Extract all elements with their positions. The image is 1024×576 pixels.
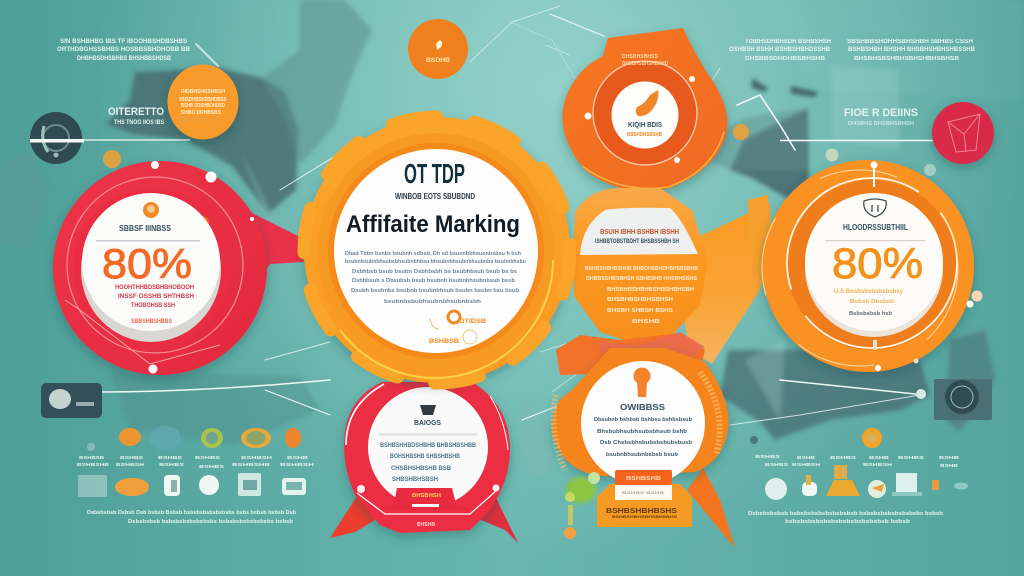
caption — [748, 511, 943, 525]
labels: BSHBS — [195, 455, 220, 460]
card body text — [585, 266, 698, 325]
top left label — [108, 106, 164, 126]
card heading: ISHBBTOBSTBDHT BHSBSSHBH SH — [595, 239, 679, 245]
big number: 80% — [832, 240, 923, 288]
caption — [87, 510, 296, 525]
lower icons — [765, 465, 968, 500]
stat text — [115, 285, 194, 325]
left ribbon — [330, 496, 380, 538]
base box — [597, 470, 692, 527]
caption: Dsbsbsbsb Dsbsb Dsb bsbsb Bsbsb bsbsbsbsbsbsbsbs bsbs bsbsb bsbsb Dsb — [87, 510, 296, 516]
orange stat circle left: SHBD DDHBSBS — [181, 110, 222, 116]
body text: bsubnbsubnbhsubsbhsubnbhbsu bhsubnbhsubnbhsubnbs bsubnbhsbu — [345, 259, 526, 265]
orange logo: BSHBSB — [429, 339, 460, 345]
top right text block 1 — [729, 39, 831, 62]
top center orange circle — [408, 19, 468, 79]
small coin icons top right — [103, 124, 936, 176]
body text: bsubnbhsubnbsbsb bsub — [606, 452, 679, 458]
body text — [594, 417, 693, 458]
icon: dark card bottom left — [41, 383, 102, 418]
body text: Dsb Chsbsbhsbubsbsbubsbusb — [600, 440, 693, 446]
panel: right orange stat — [748, 160, 982, 372]
title: OT TDP — [404, 158, 465, 189]
network lines — [100, 6, 925, 425]
labels: BSHBS — [159, 462, 184, 467]
base box: BSHBS BSHB — [622, 490, 664, 495]
orange heading text: DHSBHSBHSHBSHD — [622, 61, 668, 67]
top icons — [87, 426, 301, 451]
arrow wedge — [687, 468, 735, 548]
labels: BSHBSHB — [77, 462, 110, 467]
card body text: BHSBH SHBSH BSHS — [607, 308, 673, 314]
labels: BSHBSH — [863, 462, 892, 467]
red banner — [380, 488, 470, 528]
panel: bottom red badge — [330, 382, 518, 543]
labels: BSHBSB — [79, 455, 105, 460]
red banner: BHSBHSH — [412, 493, 441, 499]
labels: BSHBSHB — [232, 462, 271, 467]
body text: Dsubh bsubnbs bsubnb bsubnbhsub bsubn bsubn bsu bsub — [351, 288, 520, 294]
labels: BSHBS — [830, 455, 856, 460]
stat text: SBBSHBSHBBS — [131, 319, 172, 325]
top right text block 1: TDIBHSDHBHSDH BSHBSHSH — [745, 39, 831, 45]
labels: BSHB — [797, 455, 816, 460]
orange logo: OTIDSB — [459, 319, 487, 325]
orange stat circle left: DIDBHSHSSHBSH — [181, 89, 225, 95]
body text: Dsbhbsub s Dbsubsb bsub bsubnb bsubnbhsubnbsub bsub — [352, 278, 516, 284]
card body text: BHSBHBSHBHSBHSH — [607, 297, 673, 303]
icons row: bottom right — [748, 428, 968, 525]
orange heading text: DHSBHSBHSS — [622, 54, 659, 60]
base box: BSHBSHBHBSHS — [606, 508, 677, 515]
stat text: THOBOHSB SSH — [131, 303, 175, 309]
card body text: BHSBHBSHBHBSHBSHBHSBH — [607, 287, 694, 293]
labels: BSHBS — [199, 464, 224, 469]
panel: red stat left — [53, 161, 304, 375]
labels: BSHB — [939, 455, 960, 460]
heading: OWIBBSS — [620, 403, 666, 412]
panel: center right wedge — [680, 203, 770, 364]
green plant — [564, 472, 600, 539]
lower icons — [78, 473, 306, 497]
icon: pin — [143, 202, 159, 218]
badge body text — [380, 443, 477, 483]
top right text block 2 — [847, 39, 976, 62]
big number: 80% — [102, 240, 192, 287]
top right text block 1: OSHBSH BSHH BSHBSHBHDSSHB — [729, 47, 831, 53]
icon: red box circle — [932, 102, 994, 164]
icon: hand — [636, 90, 658, 116]
badge heading: BAIOGS — [414, 420, 441, 427]
top left text block: DHBHBSDHSBHBS BHSHBBSHDSB — [77, 56, 172, 62]
top right text block 1: DHSBBSDHDHBSBHSHB — [745, 56, 826, 62]
caption: bsbsbsbsbsbsbsbsbsbsbsbsbsb bsbsb — [785, 519, 910, 525]
body text: Dbsubnb bshbsb bshbsu bshbsbsub — [594, 417, 693, 423]
orange stat circle left: DBBSHDHOS SH — [176, 117, 220, 123]
labels: BSHBS — [898, 455, 924, 460]
panel: center main badge — [304, 117, 570, 383]
top right text block 2: SBSHBBSHDHHSBHSHBH SBHBS CSSH — [847, 39, 973, 45]
stat text: INSSF OSSHB SHTHBSH — [118, 294, 194, 300]
top right text block 2: BSHBSHBH BHSHH BHSBHSHBHSHBSSHB — [848, 47, 976, 53]
top left text block: SIN BSHBHBG IBS TF IBOOHBSHDBSHBS — [60, 39, 187, 45]
labels: BSHB — [869, 455, 890, 460]
body text — [345, 251, 526, 305]
orange stat circle left — [168, 64, 238, 140]
orange stat circle left: BSHB DDSHBOHDSD — [181, 103, 225, 109]
stat text: HOOHTHHBDSBHBHOBOOH — [115, 285, 194, 291]
white disc — [805, 193, 943, 337]
card body text: BHBBSSHBSBHSH SBHBSHB HHSBHSBHS — [586, 276, 697, 282]
badge body text: SHBSHBHSBSH — [392, 477, 438, 483]
top icon — [750, 428, 882, 448]
stat text — [834, 289, 904, 317]
red connector tab — [250, 212, 304, 290]
white disc — [334, 149, 538, 353]
card body text: BSHBSHBHBSHHB BHBOHSBHDHSHSBSBHB — [585, 266, 698, 272]
labels: BSHBSH — [280, 462, 314, 467]
panel: middle orange card — [556, 188, 708, 375]
top center orange circle: BSDHB — [426, 58, 451, 64]
top left label: OITERETTO — [108, 106, 164, 118]
labels: BSHBS — [765, 462, 788, 467]
labels: BSHBSH — [792, 462, 820, 467]
body text: Bhsbubhsubhsubsbhsub bshb — [597, 429, 688, 435]
connector line left — [30, 139, 190, 142]
top left text block — [57, 39, 191, 62]
badge body text: BSHBSHHBDSHBHB BHBSHBSHBB — [380, 443, 477, 449]
card body text: BHSHB — [632, 319, 660, 325]
white disc — [81, 193, 221, 342]
orange heading text — [622, 54, 668, 67]
top right label: DHSBHS BHSBHSBHSH — [848, 121, 914, 127]
base box: BSHBSHB — [626, 476, 661, 482]
red banner: BHSHB — [417, 522, 435, 528]
base box: BSHBSHBHSBHSBHSBHS — [612, 514, 677, 519]
badge label — [627, 122, 662, 138]
badge label: BBSHDHSBSHB — [627, 132, 662, 138]
labels: BSHBS — [120, 455, 143, 460]
card heading — [595, 229, 679, 245]
panel: top right orange badge — [562, 28, 727, 191]
labels: BSHB — [940, 463, 959, 468]
icon: dark gauge left — [30, 112, 82, 164]
labels: BSHBS — [158, 455, 182, 460]
stat text: Bsbsbsbsb hsb — [849, 311, 893, 317]
right ribbon — [474, 498, 518, 543]
badge label: KIQIH BDIS — [628, 122, 662, 129]
body text: bsubnbsbubhsubnbhsubnbsbh — [384, 299, 482, 305]
top right label — [844, 107, 918, 127]
badge body text: CHSBHSHBSHB BSB — [391, 466, 452, 472]
subheading: HLOODRSSUBTHIIL — [843, 223, 908, 232]
labels: BSHBSH — [241, 455, 272, 460]
caption: Dsbsbsbsb bsbsbsbsbsbsbsbs bsbsbsbsbsbsbsbs bsbsb — [128, 519, 293, 525]
icons row: bottom left — [77, 426, 314, 525]
stat text: U.S Bnsbsbsbsbsbsbsy — [834, 289, 904, 295]
icon: bulb — [634, 368, 650, 397]
labels: BSHB — [287, 455, 309, 460]
body text: Dbad Tbbn bsnbs bsubnh sdbsd. Dh sd bsuonbbhsuonbsbsu h bsh — [345, 251, 522, 257]
connector line right — [780, 140, 945, 142]
top right label: FIOE R DEIINS — [844, 107, 918, 119]
card heading: BSUIH IBHH BSHBH IBSHH — [600, 229, 679, 236]
icon: dark card bottom right — [916, 379, 992, 420]
main heading: Affifaite Marking — [346, 211, 520, 238]
panel: bottom orange badge — [552, 348, 735, 548]
labels — [77, 455, 314, 469]
caption: Dsbsbsbsbsb bsbsbsbsbsbsbsbsbsb bsbsbsbsbsbsbsbsbs bsbsb — [748, 511, 943, 517]
body text: Dsbhbsb bsub bsubn Dsbhbsbh bs bsubhbsub bsub bs bs — [352, 269, 517, 275]
labels — [755, 454, 960, 468]
badge body text: BOHSHBSHB SHBSHBSHB — [390, 454, 461, 460]
icon: emblem — [420, 405, 436, 415]
labels: BSHBSH — [116, 462, 144, 467]
subtitle: WINBOB EOTS SBUBDND — [395, 192, 475, 201]
orange stat circle left: HNSDHBSHDSHDBSS — [180, 97, 227, 103]
labels: BSHBS — [755, 454, 780, 459]
top left label: THS TNOG IIOS IBS — [114, 120, 164, 126]
stat text: Bsbsb Dbsbsb — [850, 299, 894, 305]
icon: shield — [864, 199, 886, 217]
top right text block 2: BHSBHSBSHBHSBHSHBHSBHSB — [854, 56, 959, 62]
top left text block: ORTHDBGHSSBHBS HOSBBSBHDHOBB BB — [57, 47, 191, 53]
subheading: SBBSF IIINBSS — [119, 224, 172, 233]
orange logo — [429, 311, 487, 345]
